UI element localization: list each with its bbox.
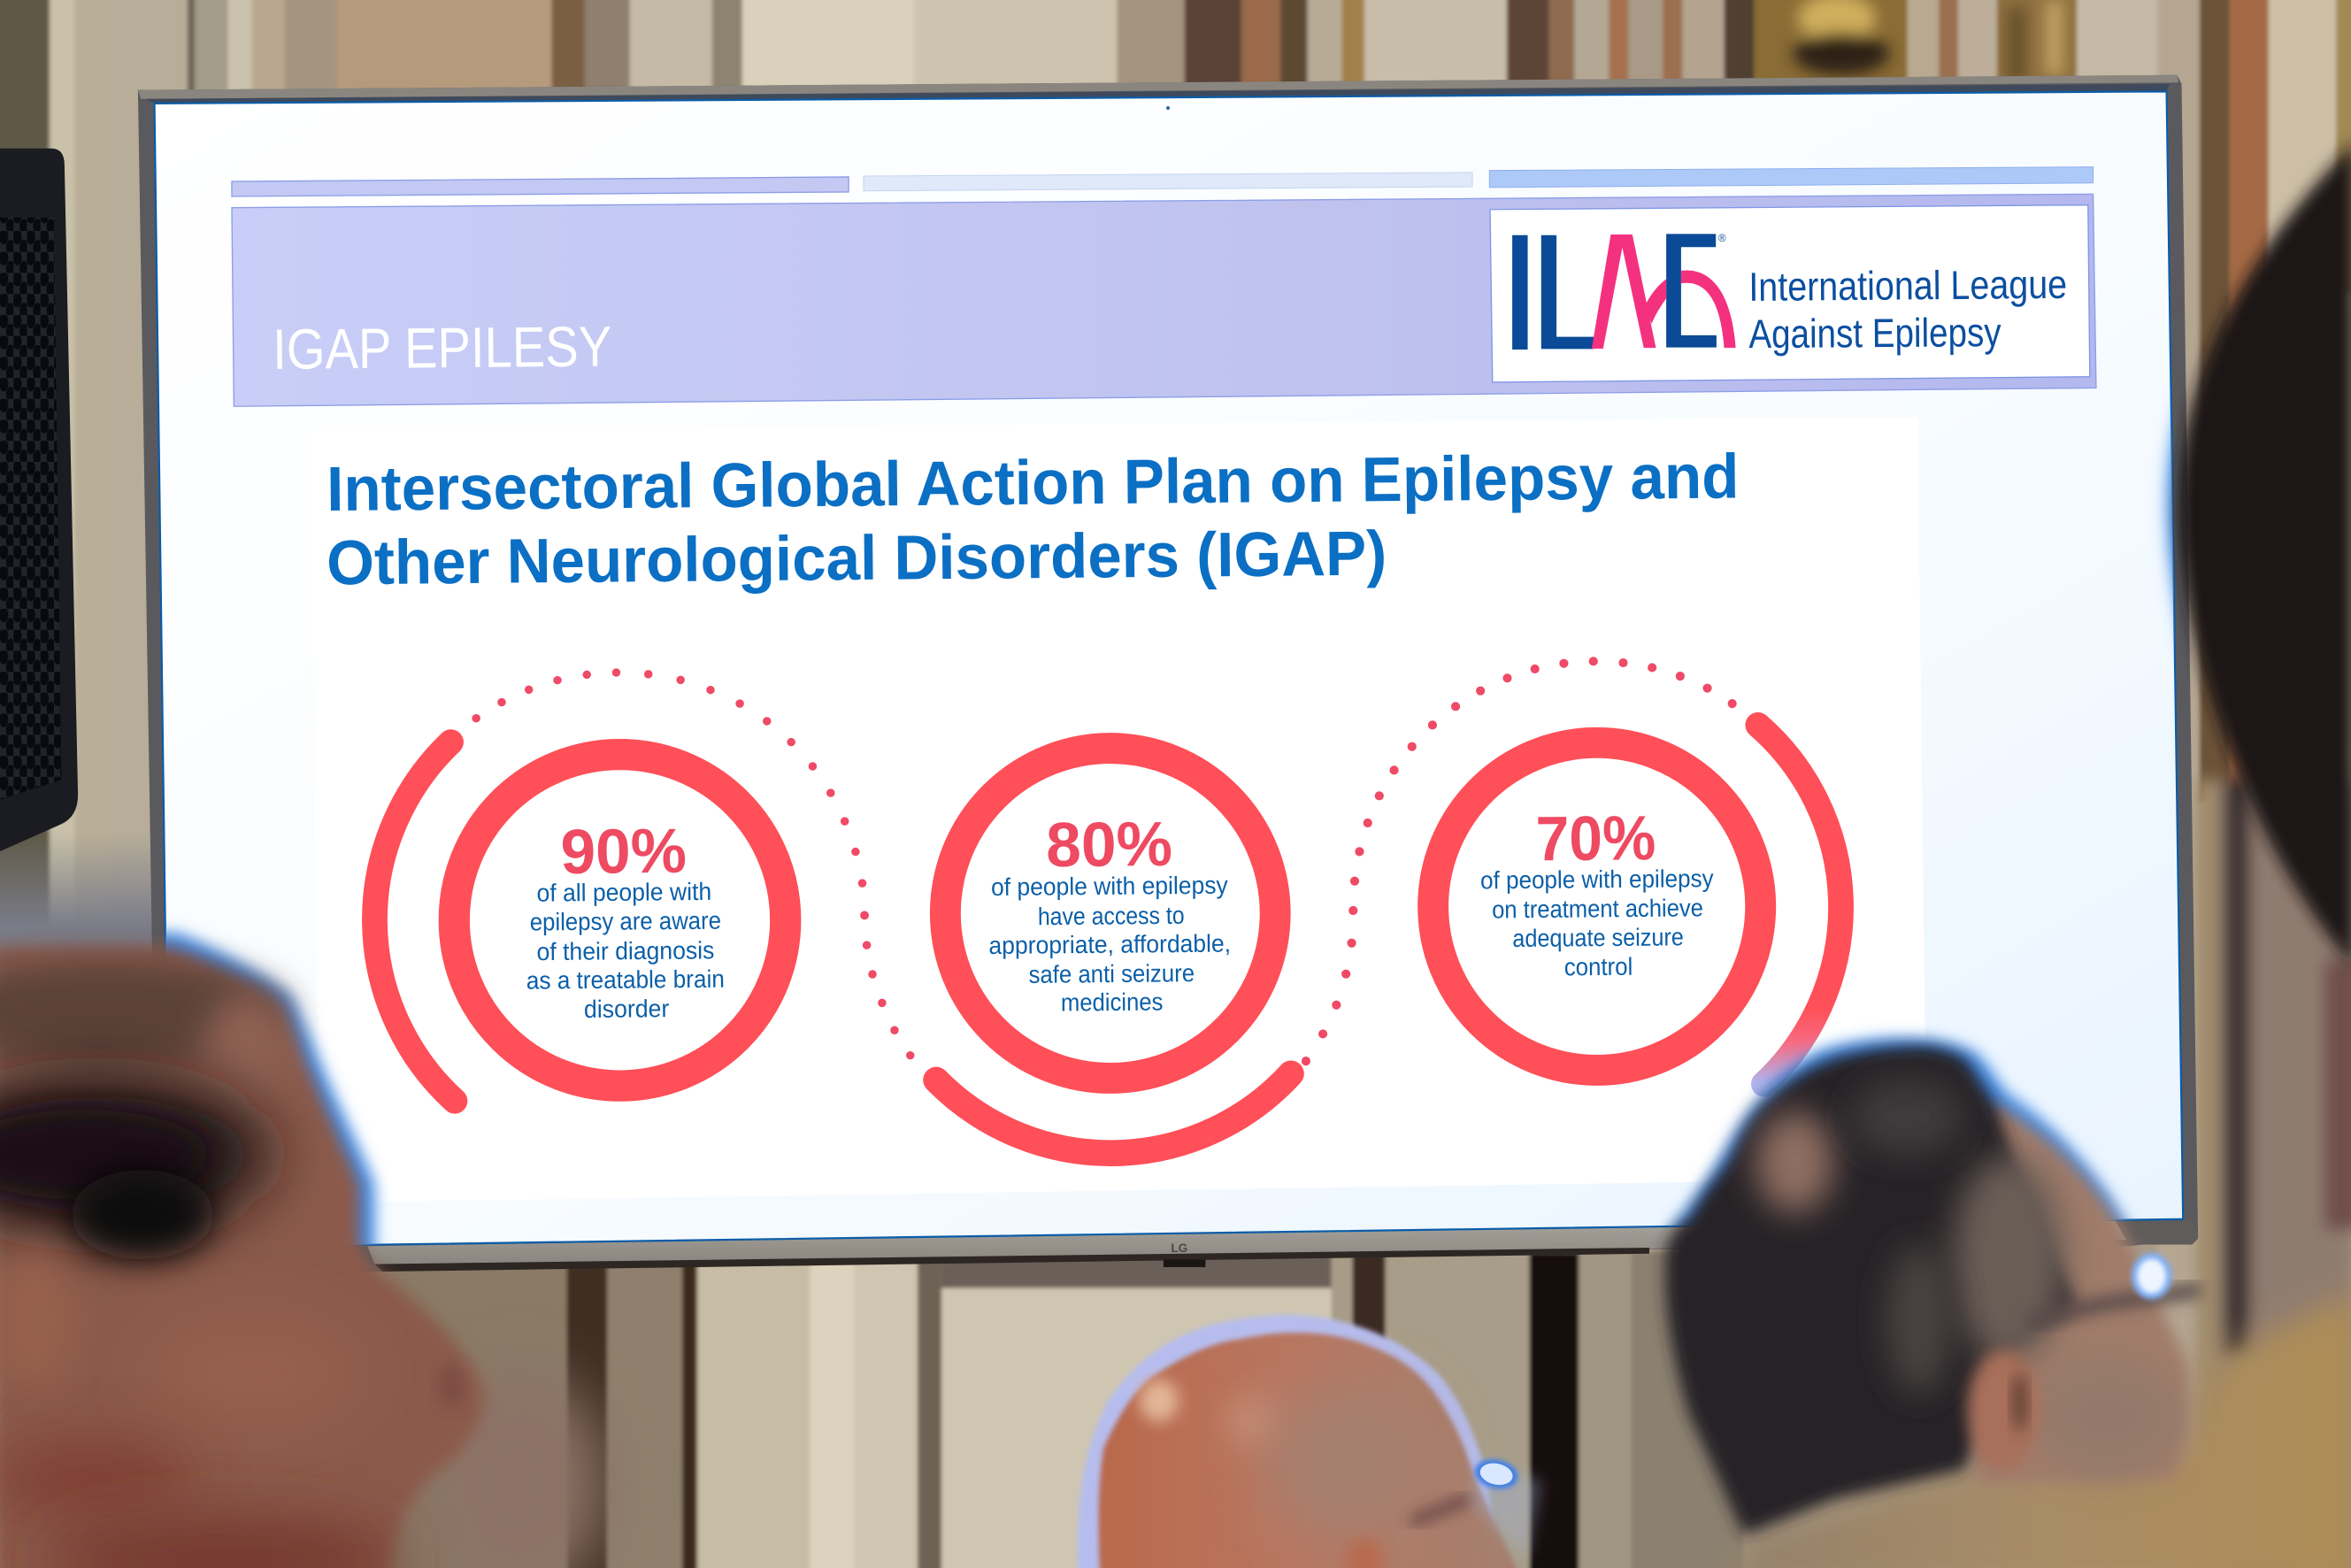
audience: right man shirt and neck xyxy=(1725,1289,2351,1568)
face of right man xyxy=(1919,1103,2189,1485)
logo wordmark line 1: International League xyxy=(1748,262,2067,310)
speaker on the left wall xyxy=(0,149,78,855)
description 80: safe anti seizure xyxy=(1028,959,1195,988)
banner title: IGAP EPILESY xyxy=(273,315,611,381)
description 80: appropriate, affordable, xyxy=(988,930,1231,959)
logo wordmark line 2: Against Epilepsy xyxy=(1748,310,2001,357)
outer arc 90 xyxy=(374,742,455,1101)
audience: centre bald head xyxy=(1078,1315,1541,1568)
LG logo on bezel: LG xyxy=(1171,1241,1187,1255)
slide header bars xyxy=(232,167,2094,196)
screen glow around right man xyxy=(1658,1025,2138,1226)
logo letter E xyxy=(1666,234,1717,348)
description 70: adequate seizure xyxy=(1512,923,1684,952)
description 70: of people with epilepsy xyxy=(1480,865,1714,894)
description 90: disorder xyxy=(584,995,669,1023)
description 70 xyxy=(1480,865,1714,980)
main title: Other Neurological Disorders (IGAP) xyxy=(327,519,1387,598)
description 80 xyxy=(988,872,1231,1017)
television bezel xyxy=(138,75,2198,1274)
stat 80 percent xyxy=(936,749,1291,1153)
glasses centre person xyxy=(1472,1456,1541,1559)
logo pink figure xyxy=(1592,234,1736,349)
hair of left man xyxy=(0,1077,270,1259)
stat 70 percent xyxy=(1433,725,1841,1084)
dotted arc connecting second and third rings xyxy=(1302,657,1737,1065)
outer arc 80 xyxy=(936,1073,1291,1153)
gold ornament above the television xyxy=(1794,0,2062,82)
bald head skin xyxy=(1099,1333,1526,1568)
ring 80 xyxy=(945,749,1275,1078)
face of left man xyxy=(0,946,484,1568)
outer arc 70 xyxy=(1758,725,1841,1084)
value 90%: 90% xyxy=(560,817,687,888)
description 90: of all people with xyxy=(536,878,711,907)
value 70%: 70% xyxy=(1535,803,1656,874)
description 90: epilepsy are aware xyxy=(530,907,721,936)
description 90 xyxy=(526,878,725,1023)
audience: right man head xyxy=(1649,1038,2201,1535)
ring 90 xyxy=(454,755,786,1086)
description 90: as a treatable brain xyxy=(526,965,725,995)
glasses right man xyxy=(2027,1253,2201,1323)
dotted arc connecting first and second rings xyxy=(472,668,914,1059)
main title: Intersectoral Global Action Plan on Epilepsy and xyxy=(327,442,1740,525)
hair of right man xyxy=(1665,1046,2077,1535)
registered mark: ® xyxy=(1718,232,1726,244)
ring 70 xyxy=(1433,742,1761,1070)
white content panel xyxy=(311,417,1926,1203)
audience: far right head xyxy=(2166,127,2351,982)
value 80%: 80% xyxy=(1046,810,1172,880)
description 80: have access to xyxy=(1038,902,1185,930)
stat 90 percent xyxy=(374,742,786,1101)
slide banner xyxy=(232,194,2096,406)
logo letter I xyxy=(1512,235,1528,350)
ear of right man xyxy=(1967,1349,2040,1470)
head rim glow xyxy=(1078,1315,1500,1568)
camera sensor on bezel xyxy=(1164,1259,1205,1267)
description 90: of their diagnosis xyxy=(536,936,714,965)
description 70: on treatment achieve xyxy=(1492,894,1703,923)
blurred wall panels at right edge xyxy=(2196,780,2351,1568)
audience: left man head xyxy=(0,933,607,1568)
logo letter L xyxy=(1541,235,1594,349)
description 70: control xyxy=(1564,953,1633,980)
ILAE logo panel xyxy=(1490,205,2090,382)
description 80: of people with epilepsy xyxy=(991,872,1228,901)
description 80: medicines xyxy=(1061,988,1163,1017)
screen glow around left man xyxy=(150,933,375,1259)
television screen xyxy=(155,91,2183,1248)
main title xyxy=(327,442,1740,598)
